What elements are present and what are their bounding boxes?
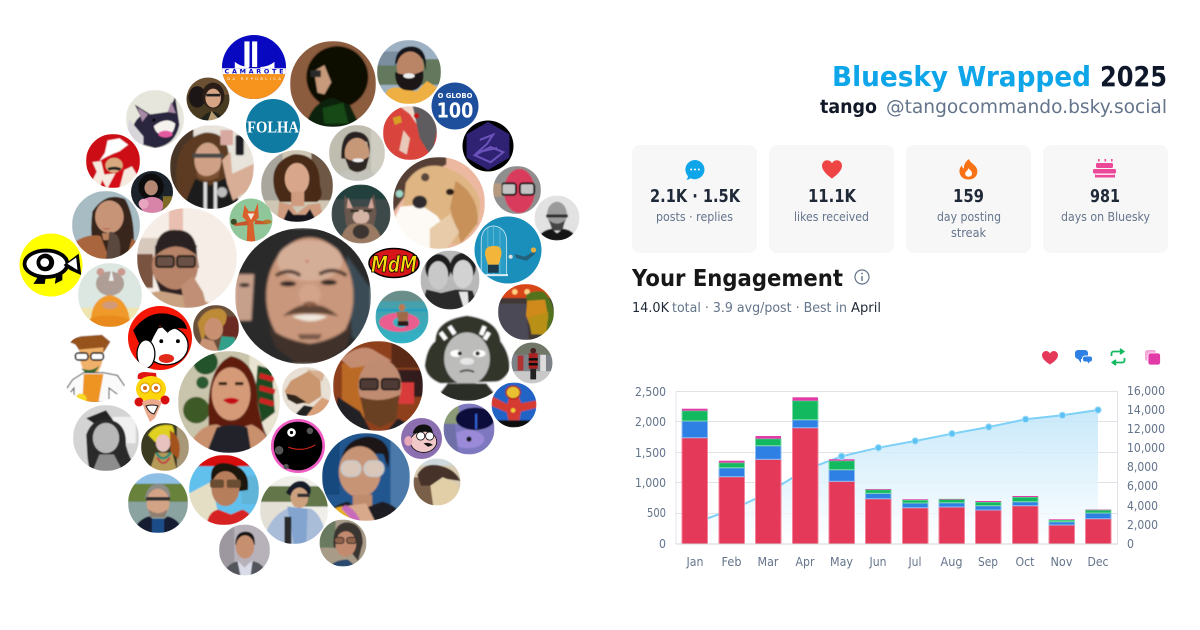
- icon: likes: [1042, 351, 1058, 364]
- avatar: crowd with red-striped shirt: [512, 342, 552, 384]
- engagement summary text: April: [851, 300, 881, 316]
- icon: quotes: [1145, 350, 1160, 365]
- avatar: man in yellow shirt: [377, 40, 441, 104]
- avatar: woman with grey hair and glasses: [320, 520, 366, 566]
- avatar: orange fox drawing: [230, 198, 272, 242]
- right axis labels: 6,000: [1127, 478, 1158, 493]
- avatar: O Globo 100 logo: O GLOBO: [438, 91, 472, 100]
- chart grid: [676, 391, 1118, 544]
- left axis labels: 0: [659, 536, 666, 551]
- left axis labels: [635, 384, 666, 551]
- avatar: Folha logo: FOLHA: [247, 117, 299, 136]
- right axis labels: [1127, 383, 1165, 551]
- avatar: lightbulb in birdcage: [474, 216, 542, 284]
- avatar: sketch of girl with stars: [423, 313, 511, 401]
- left axis labels: 2,000: [635, 414, 666, 429]
- avatar: smiling man with beard: [329, 125, 385, 181]
- left axis labels: 1,000: [635, 475, 666, 490]
- avatar: woman in red lips with Christmas decor: [178, 350, 280, 453]
- avatar: Camarote da Republica logo: DA REPÚBLICA: [227, 76, 281, 81]
- icon: heart: [822, 160, 842, 178]
- avatar: woman with curly hair: [261, 150, 333, 222]
- stat card: day posting streak: day posting: [937, 209, 1001, 224]
- left axis labels: 500: [647, 505, 666, 520]
- right axis labels: 14,000: [1127, 402, 1165, 417]
- icon: birthday cake: [1093, 159, 1116, 178]
- right axis labels: 4,000: [1127, 498, 1158, 513]
- stat card: day posting streak: streak: [951, 225, 987, 240]
- avatar: purple hexagon logo on black: [462, 120, 514, 172]
- stat card: days on Bluesky: 981: [1090, 186, 1120, 207]
- avatar: rhino monk: [78, 263, 142, 327]
- avatar: woman in curls and black coat: [290, 41, 376, 127]
- right axis labels: 2,000: [1127, 517, 1158, 532]
- month labels: Mar: [758, 554, 779, 569]
- icon: flame: [959, 159, 977, 180]
- avatar: O Globo 100 logo: [432, 82, 478, 130]
- avatar: purple cave and waterfall: [444, 404, 494, 454]
- right axis labels: 0: [1127, 536, 1134, 551]
- profile name and handle: @tangocommando.bsky.social: [886, 96, 1167, 118]
- avatar: woman from behind: [414, 458, 460, 506]
- month labels: Nov: [1050, 554, 1073, 569]
- avatar: bald man in greyscale: [534, 196, 580, 240]
- month labels: Feb: [722, 554, 742, 569]
- left axis labels: 2,500: [635, 384, 666, 399]
- avatar: Folha logo: [246, 99, 300, 153]
- heading: Your Engagement: Your Engagement: [631, 264, 843, 292]
- avatar: man with scarf: [260, 476, 328, 544]
- avatar: calico cat: [332, 184, 390, 244]
- month labels: Jan: [686, 554, 704, 569]
- avatar: colourful blonde woman: [141, 423, 189, 471]
- profile name and handle: tango: [820, 96, 877, 118]
- month labels: Dec: [1088, 554, 1109, 569]
- avatar: yellow fish eye logo: [20, 234, 82, 296]
- avatar: woman in black and white: [73, 405, 139, 471]
- icon: info: [855, 270, 869, 284]
- stat card: posts and replies: 2.1K · 1.5K: [650, 186, 741, 207]
- avatar: woman with reddish hair: [193, 305, 239, 351]
- month labels: Oct: [1016, 554, 1035, 569]
- avatar: golden retriever dog: [393, 157, 485, 249]
- month labels: Jul: [908, 554, 922, 569]
- avatar: black creature with pink ring: [271, 419, 325, 473]
- avatar: bald bearded man with hand on head: [333, 341, 423, 431]
- avatar: black hair cartoon on red: [128, 306, 192, 370]
- avatar: clown with yellow goggles: [134, 372, 170, 422]
- stat card: day posting streak: [906, 145, 1031, 253]
- stat card: days on Bluesky: [1043, 145, 1168, 253]
- title: Bluesky Wrapped: [832, 60, 1091, 93]
- month labels: May: [830, 554, 854, 569]
- avatar: bearded grey-haired man with lake: [128, 473, 188, 533]
- avatar: two men in black and white: [420, 250, 480, 310]
- avatar: cartoon doctor: [66, 334, 125, 402]
- cumulative line markers: [838, 407, 1101, 459]
- stat card: likes received: likes received: [794, 209, 869, 224]
- avatar: cartoon with glasses on purple: [401, 418, 442, 459]
- stat card: day posting streak: 159: [953, 186, 984, 207]
- icon: replies: [1075, 350, 1092, 364]
- avatar: MdM logo: MdM: [371, 253, 417, 278]
- avatar: cartoon man with white hat on red: [86, 134, 140, 188]
- right axis labels: 8,000: [1127, 459, 1158, 474]
- avatar: red superhero on blue: [492, 382, 536, 428]
- month labels: Sep: [978, 554, 998, 569]
- avatar: man seen from the side: [282, 367, 331, 416]
- month labels: [686, 554, 1109, 569]
- avatar: man with glasses leaning on hand: [137, 208, 237, 308]
- avatar: woman with glasses and cat: [186, 78, 230, 120]
- avatar: short curly-haired woman with round glasses: [322, 433, 410, 521]
- avatar: woman in red dress illustration: [383, 106, 437, 160]
- title: 2025: [1100, 60, 1167, 93]
- avatar: dark-haired girl with pink toy: [131, 171, 173, 214]
- cumulative engagement line: [694, 410, 1098, 523]
- icon: reposts: [1112, 349, 1124, 365]
- engagement summary text: total · 3.9 avg/post · Best in: [672, 300, 847, 316]
- stat card: likes received: [769, 145, 894, 253]
- avatar: O Globo 100 logo: 100: [437, 98, 473, 122]
- avatar: big smiling man with beard: [235, 228, 371, 364]
- right axis labels: 10,000: [1127, 440, 1165, 455]
- avatar: man in suit: [219, 524, 270, 576]
- avatar: woman with long brown hair: [72, 191, 140, 259]
- stacked monthly bars: [682, 397, 1111, 544]
- avatar bubble cluster: [20, 35, 580, 576]
- avatar: man on pink pool float: [376, 290, 428, 344]
- month labels: Aug: [940, 554, 962, 569]
- icon: speech bubble: [685, 160, 704, 180]
- stat card: posts and replies: [632, 145, 757, 253]
- cumulative engagement area: [694, 410, 1098, 544]
- stat card: days on Bluesky: days on Bluesky: [1061, 209, 1151, 224]
- stat card: likes received: 11.1K: [808, 186, 857, 207]
- month labels: Jun: [869, 554, 886, 569]
- avatar: Camarote da Republica logo: [222, 35, 286, 99]
- avatar: curly-haired woman in sunglasses: [189, 455, 259, 525]
- month labels: Apr: [796, 554, 815, 569]
- avatar: spider-man mask with glasses: [493, 166, 541, 214]
- avatar: black and white cat: [126, 90, 184, 148]
- right axis labels: 16,000: [1127, 383, 1165, 398]
- left axis labels: 1,500: [635, 445, 666, 460]
- avatar: bearded man under orange lights: [498, 284, 554, 340]
- chart legend icons: [1042, 349, 1160, 365]
- engagement summary text: 14.0K: [632, 300, 670, 316]
- avatar: man with long curly hair: [170, 125, 254, 209]
- engagement chart: [635, 383, 1165, 569]
- stat card: posts and replies: posts · replies: [656, 209, 733, 224]
- right axis labels: 12,000: [1127, 421, 1165, 436]
- avatar: Camarote da Republica logo: CAMAROTE: [225, 67, 283, 75]
- avatar: MdM logo: [369, 248, 419, 278]
